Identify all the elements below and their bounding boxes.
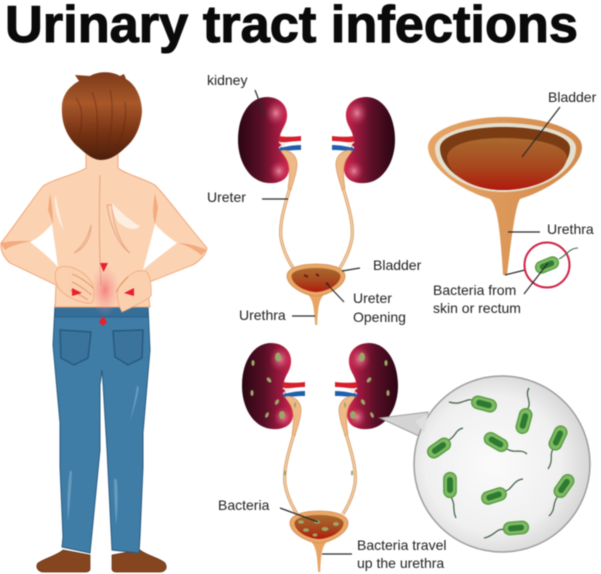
left arm gap: [30, 224, 58, 267]
leader: urethra: [508, 231, 540, 233]
back pockets: [60, 330, 143, 365]
urine: [447, 138, 567, 190]
waistband: [55, 305, 148, 317]
leader: kidney: [255, 90, 265, 116]
bacterium 3: [482, 430, 510, 454]
label: bacteria from skin or rectum: skin or rectum: [433, 300, 521, 316]
bacterium: [534, 255, 560, 275]
red ring: [524, 242, 570, 288]
shoulder highlights: [55, 195, 140, 230]
flagellum: [559, 248, 578, 259]
figure: man from behind holding lower back: [0, 72, 207, 572]
dark interior: [440, 127, 570, 190]
neck and torso: [1, 150, 207, 307]
pointer join: [415, 414, 428, 433]
label: bladder: Bladder: [548, 89, 597, 105]
leader: urethra: [322, 553, 352, 555]
arm shading: [0, 193, 207, 255]
leader: ureter: [262, 198, 288, 200]
pain glow: [90, 264, 120, 316]
bacterium 1: [470, 395, 498, 413]
hair: [62, 72, 142, 160]
label: bacteria from skin or rectum: Bacteria from: [433, 282, 516, 298]
bacterium 8: [552, 472, 576, 500]
leader: bacteria: [524, 263, 548, 294]
panel: large bladder: [428, 89, 597, 316]
back muscle lines: [74, 175, 130, 285]
small bladder with urethra: [287, 264, 345, 325]
label: bacteria: Bacteria: [218, 497, 270, 513]
label: urethra: Urethra: [547, 221, 594, 237]
left kidney with ureter: [238, 97, 301, 268]
label: bacteria travel up the urethra: Bacteria travel: [357, 537, 446, 553]
bacterium 2: [515, 407, 533, 435]
bacteria spots: [250, 352, 390, 537]
finger lines: [70, 274, 128, 300]
panel: healthy urinary system: [207, 72, 422, 325]
label: bacteria travel up the urethra: up the urethra: [357, 555, 444, 571]
bladder wall and urethra: [428, 117, 582, 275]
leader: bacteria: [280, 508, 318, 522]
bacterium 7: [480, 486, 508, 506]
right arm gap: [143, 224, 177, 270]
label: ureter: Ureter: [207, 189, 246, 205]
label: urethra: Urethra: [239, 307, 286, 323]
left hand: [55, 266, 94, 303]
right kidney with ureter: [332, 97, 395, 268]
flagella: [449, 388, 558, 538]
label: bladder: Bladder: [373, 257, 422, 273]
bacterium 9: [503, 521, 529, 535]
label: kidney: kidney: [207, 72, 247, 88]
leader: urethra: [292, 315, 315, 317]
infected right kidney: [335, 343, 398, 514]
infected left kidney: [242, 343, 305, 514]
label: ureter opening: Ureter: [353, 290, 392, 306]
magnifier lens: [414, 376, 590, 552]
jeans: [53, 305, 150, 553]
shoes: [37, 550, 166, 572]
hair strands: [76, 90, 126, 152]
inner lining: [435, 123, 576, 192]
right hand: [117, 271, 151, 312]
bacterium 4: [547, 424, 569, 452]
panel: infected urinary system: [218, 343, 446, 572]
ureter openings: [304, 274, 329, 285]
leader: ureter opening: [326, 283, 344, 302]
label: ureter opening: Opening: [353, 309, 406, 325]
bacterium 5: [425, 436, 453, 460]
callout: magnified bacteria: [380, 376, 590, 552]
callout: bacterium circle: [524, 242, 578, 288]
leader: bladder: [522, 107, 560, 157]
magnifier pointer: [380, 412, 428, 437]
leader: from urethra tip: [505, 270, 525, 275]
jeans highlights: [67, 385, 139, 525]
bacterium 6: [444, 472, 456, 498]
infected bladder: [290, 511, 348, 572]
pain arrows: [72, 263, 134, 296]
lower back arrow: [99, 316, 107, 326]
leader: bladder: [342, 268, 360, 271]
